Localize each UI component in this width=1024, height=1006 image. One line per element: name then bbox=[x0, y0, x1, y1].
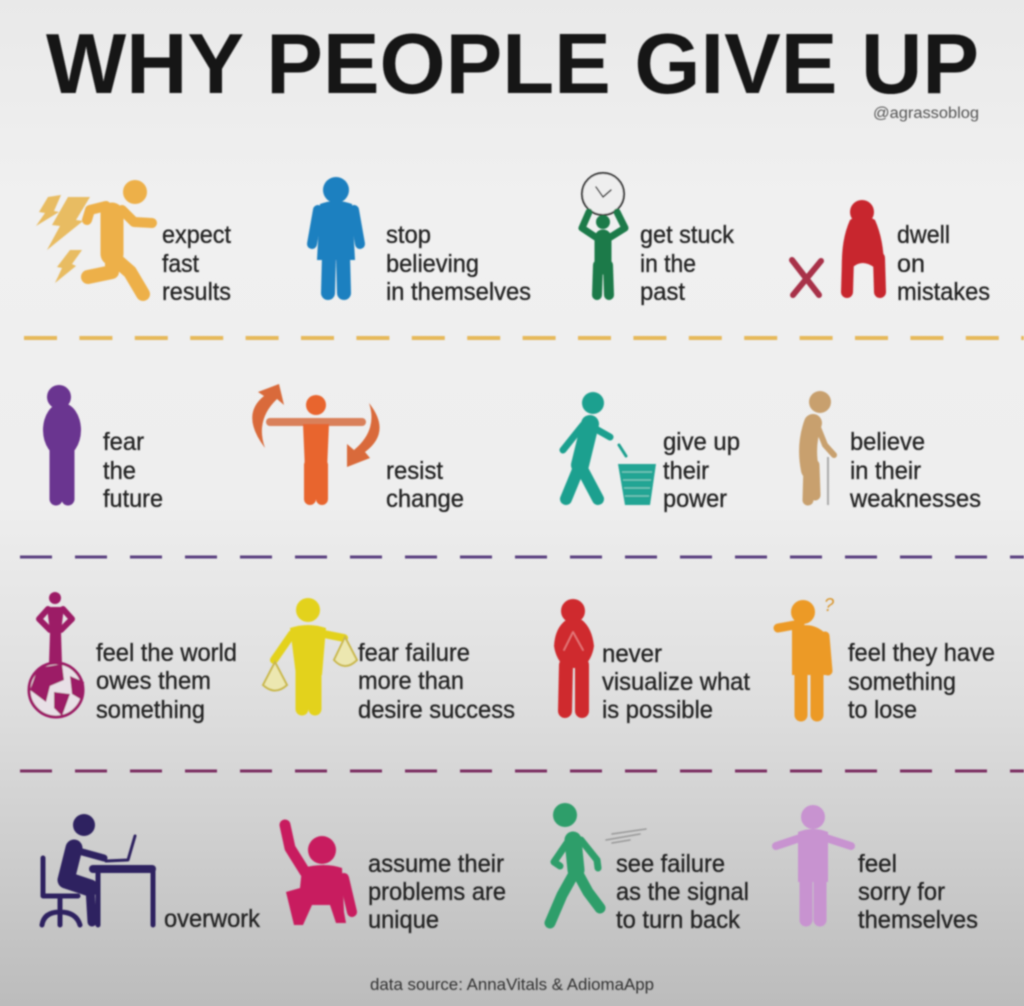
divider: gold dashes bbox=[24, 336, 1024, 340]
icon: figure standing on globe bbox=[29, 592, 84, 717]
icon: figure with question mark: ? bbox=[824, 595, 834, 615]
icon: figure throwing into bin bbox=[563, 392, 656, 505]
text: believe in their weaknesses: in their bbox=[850, 457, 921, 485]
text: never visualize what is possible: visualize what bbox=[602, 668, 750, 696]
title: WHY PEOPLE GIVE UP bbox=[46, 17, 979, 112]
text: give up their power bbox=[663, 428, 740, 513]
text: believe in their weaknesses: weaknesses bbox=[849, 485, 981, 513]
text: feel sorry for themselves: themselves bbox=[858, 906, 978, 934]
icon: elderly figure with cane bbox=[808, 391, 834, 505]
text: get stuck in the past: get stuck bbox=[640, 221, 734, 249]
text: expect fast results: results bbox=[162, 278, 231, 306]
text: see failure as the signal to turn back bbox=[616, 850, 749, 934]
icon: blue standing figure bbox=[312, 177, 360, 293]
text: fear failure more than desire success: more than bbox=[358, 667, 464, 695]
text: expect fast results: fast bbox=[162, 250, 199, 278]
text: dwell on mistakes: dwell bbox=[897, 221, 950, 249]
text: believe in their weaknesses: believe bbox=[850, 428, 925, 456]
icon: figure holding clock bbox=[582, 173, 625, 295]
text: feel they have something to lose: feel they have bbox=[848, 639, 995, 667]
divider: purple dashes bbox=[20, 556, 1024, 558]
text: assume their problems are unique: unique bbox=[368, 906, 439, 934]
icon: figure walking back bbox=[550, 803, 646, 923]
text: dwell on mistakes: on bbox=[897, 250, 925, 278]
text: feel sorry for themselves: sorry for bbox=[858, 878, 945, 906]
text: feel sorry for themselves bbox=[858, 850, 978, 934]
text: feel the world owes them something: feel the world bbox=[96, 639, 237, 667]
text: fear the future: fear bbox=[103, 428, 144, 456]
icon: figure holding scales bbox=[263, 598, 357, 709]
text: assume their problems are unique bbox=[368, 850, 506, 934]
icon: running figure with lightning bbox=[36, 180, 152, 294]
icon: figure at desk with laptop bbox=[42, 814, 153, 925]
text: expect fast results bbox=[162, 221, 231, 306]
icon: lilac figure shrugging bbox=[776, 805, 851, 920]
icon: figure with raised arm bbox=[285, 825, 352, 925]
divider: magenta dashes bbox=[20, 770, 1024, 772]
panel: row 4 bbox=[42, 803, 978, 934]
text: dwell on mistakes bbox=[897, 221, 990, 306]
text: never visualize what is possible: never bbox=[602, 640, 662, 668]
text: fear the future bbox=[103, 428, 163, 513]
text: overwork: overwork bbox=[164, 905, 260, 933]
text: feel they have something to lose: something bbox=[848, 668, 956, 696]
text: stop believing in themselves: in themselves bbox=[386, 278, 531, 306]
text: feel they have something to lose: to lose bbox=[848, 696, 917, 724]
data source footer: data source: AnnaVitals & AdiomaApp bbox=[370, 975, 654, 994]
icon: figure with question mark bbox=[778, 595, 834, 715]
icon: T-pose figure with arrows bbox=[252, 384, 380, 499]
text: feel they have something to lose bbox=[848, 639, 995, 724]
text: see failure as the signal to turn back: as the signal bbox=[616, 878, 749, 906]
text: get stuck in the past: in the bbox=[640, 250, 696, 278]
text: feel the world owes them something bbox=[96, 639, 237, 724]
panel: row 3 bbox=[29, 592, 995, 724]
text: give up their power: power bbox=[663, 485, 727, 513]
text: get stuck in the past bbox=[640, 221, 734, 306]
text: dwell on mistakes: mistakes bbox=[897, 278, 990, 306]
icon: purple figure bbox=[43, 385, 81, 499]
text: never visualize what is possible bbox=[602, 640, 750, 724]
text: fear the future: future bbox=[103, 485, 163, 513]
text: fear failure more than desire success: desire success bbox=[358, 696, 515, 724]
text: resist change: resist bbox=[386, 457, 443, 485]
text: stop believing in themselves: stop bbox=[386, 221, 431, 249]
text: believe in their weaknesses bbox=[849, 428, 981, 513]
text: expect fast results: expect bbox=[162, 221, 231, 249]
text: assume their problems are unique: assume their bbox=[368, 850, 504, 878]
text: feel the world owes them something: something bbox=[96, 696, 205, 724]
text: fear failure more than desire success: fear failure bbox=[358, 639, 470, 667]
credit handle: @agrassoblog bbox=[873, 105, 979, 122]
panel: row 1 bbox=[36, 173, 990, 306]
text: assume their problems are unique: problems are bbox=[368, 878, 506, 906]
text: feel the world owes them something: owes them bbox=[96, 667, 211, 695]
text: fear the future: the bbox=[103, 457, 136, 485]
text: never visualize what is possible: is possible bbox=[602, 696, 713, 724]
text: see failure as the signal to turn back: see failure bbox=[616, 850, 725, 878]
text: see failure as the signal to turn back: to turn back bbox=[616, 906, 740, 934]
text: stop believing in themselves: believing bbox=[386, 250, 479, 278]
text: fear failure more than desire success bbox=[358, 639, 515, 724]
text: give up their power: their bbox=[663, 457, 709, 485]
text: get stuck in the past: past bbox=[640, 278, 685, 306]
text: resist change: change bbox=[386, 485, 464, 513]
text: feel sorry for themselves: feel bbox=[858, 850, 897, 878]
text: give up their power: give up bbox=[663, 428, 740, 456]
icon: figure covering eyes bbox=[554, 599, 594, 711]
text: stop believing in themselves bbox=[386, 221, 531, 306]
text: resist change bbox=[386, 457, 464, 513]
icon: hunched figure with red X bbox=[792, 200, 884, 295]
panel: row 2 bbox=[43, 384, 981, 513]
